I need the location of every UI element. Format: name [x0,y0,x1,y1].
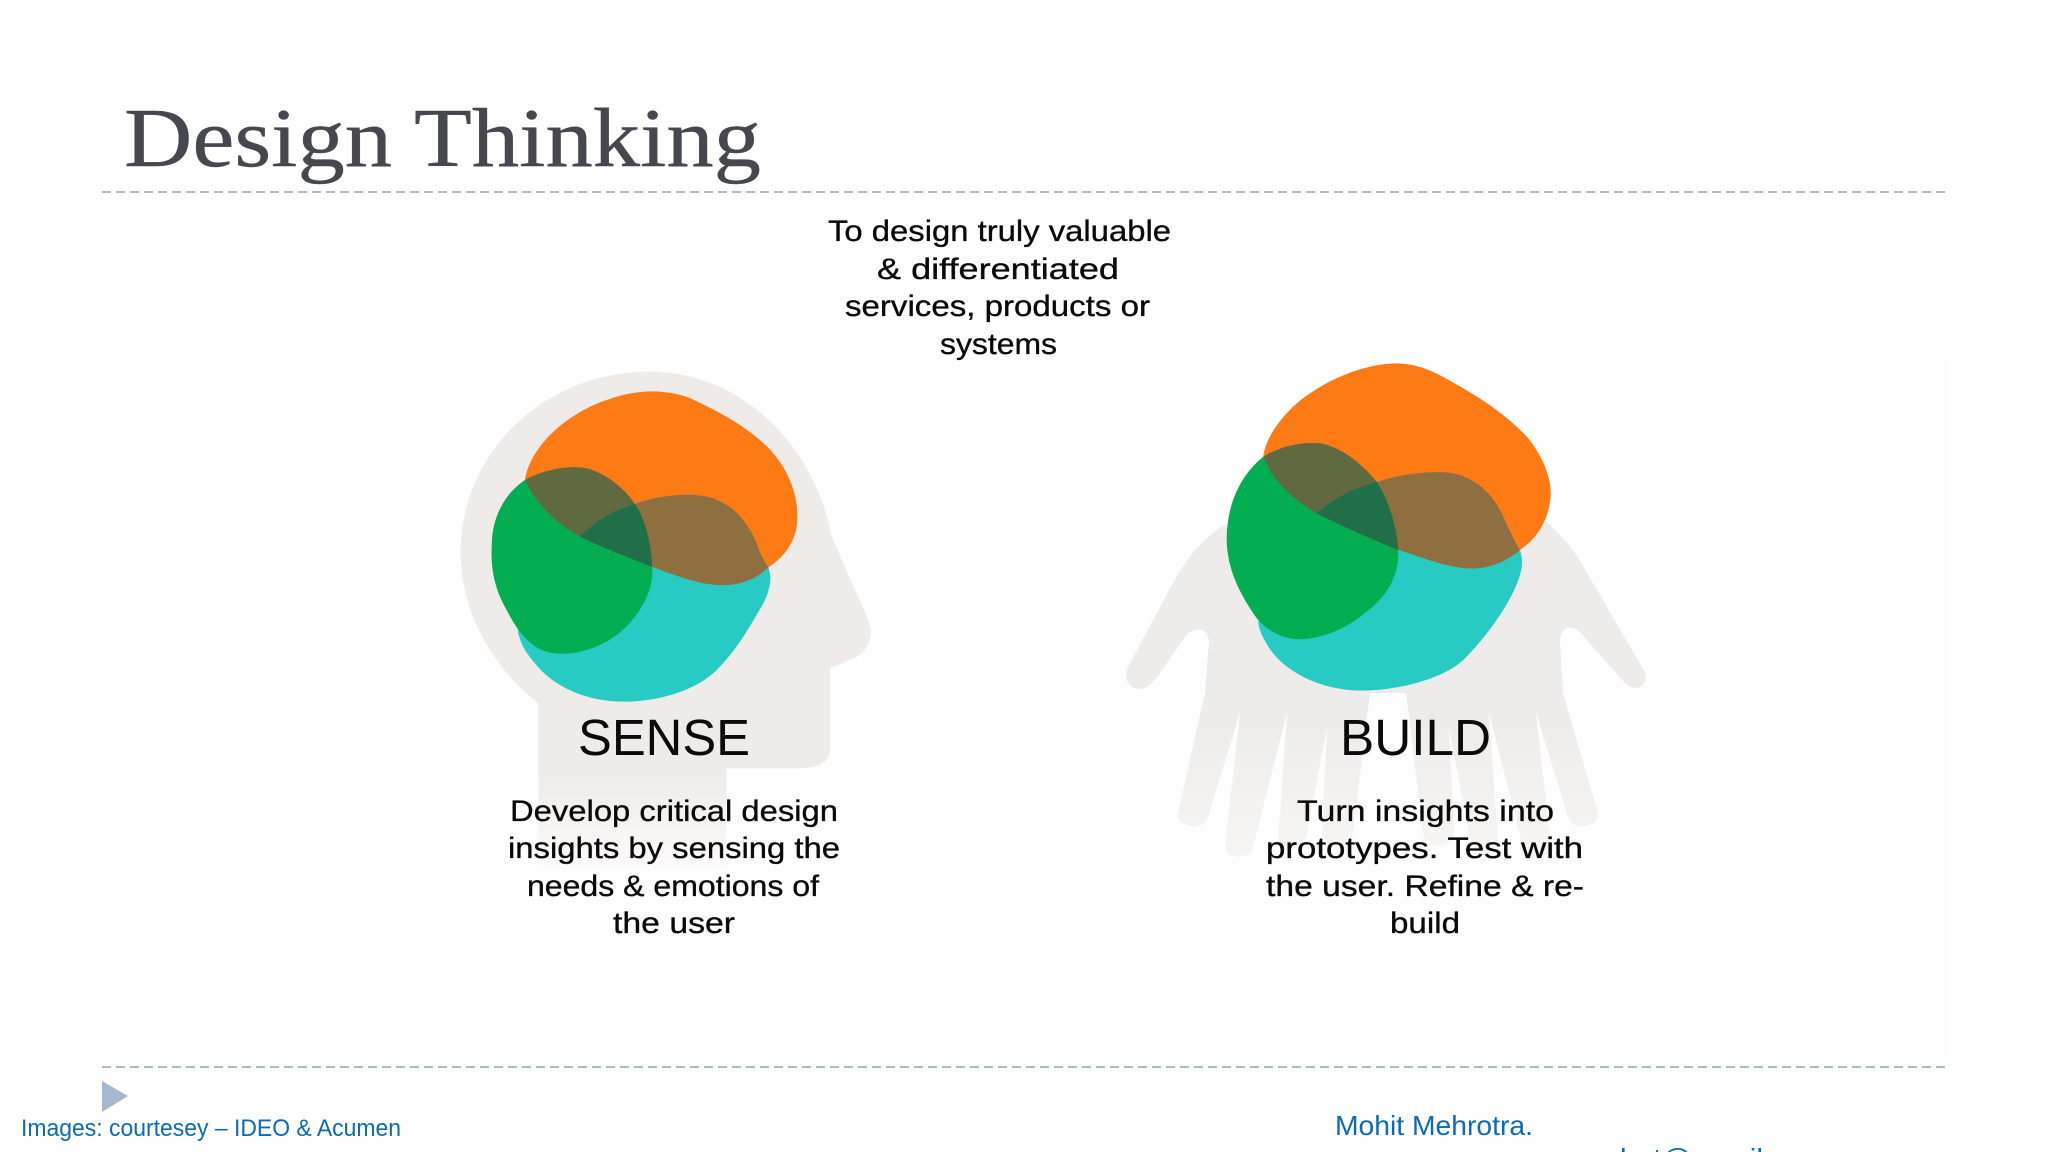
icon: bullet triangle [102,1081,128,1112]
text: sense description: the user [613,907,735,940]
overlap: all three [580,504,652,567]
heading: SENSE: SENSE [578,709,750,766]
teal blob [1258,472,1522,691]
text: build description [1266,795,1584,940]
overlap: orange and teal [1317,472,1520,568]
text: image credit: Images: courtesey – IDEO & Acumen [21,1115,401,1142]
title: Design Thinking [124,92,761,185]
intro text: & differentiated [877,253,1119,286]
orange blob [525,391,797,585]
text: build description: build [1390,907,1460,940]
text: sense description: needs & emotions of [527,870,820,903]
orange blob [1263,363,1551,569]
text: author: Mohit Mehrotra. [1335,1110,1533,1141]
icon: head silhouette with brain blobs [461,372,871,870]
overlap: orange and teal [580,494,768,586]
icon: build blobs [1227,363,1551,691]
intro text: services, products or [845,290,1150,323]
text: build description: prototypes. Test with [1266,832,1583,865]
head silhouette [461,372,871,870]
text: sense description [508,795,840,940]
overlap: orange and green [525,467,652,567]
intro text: systems [940,328,1057,361]
text: build description: Turn insights into [1297,795,1554,828]
icon: open hands silhouette [1126,522,1646,857]
overlap: all three [1316,482,1398,550]
intro text: To design truly valuable [828,215,1171,248]
green blob [492,467,652,654]
intro text [828,215,1171,361]
text: sense description: Develop critical design [510,795,838,828]
overlap: orange and green [1264,443,1398,550]
text: build description: the user. Refine & re- [1266,870,1584,903]
green blob [1227,443,1398,639]
text: sense description: insights by sensing the [508,832,840,865]
teal blob [518,495,770,702]
heading: BUILD: BUILD [1340,709,1491,766]
